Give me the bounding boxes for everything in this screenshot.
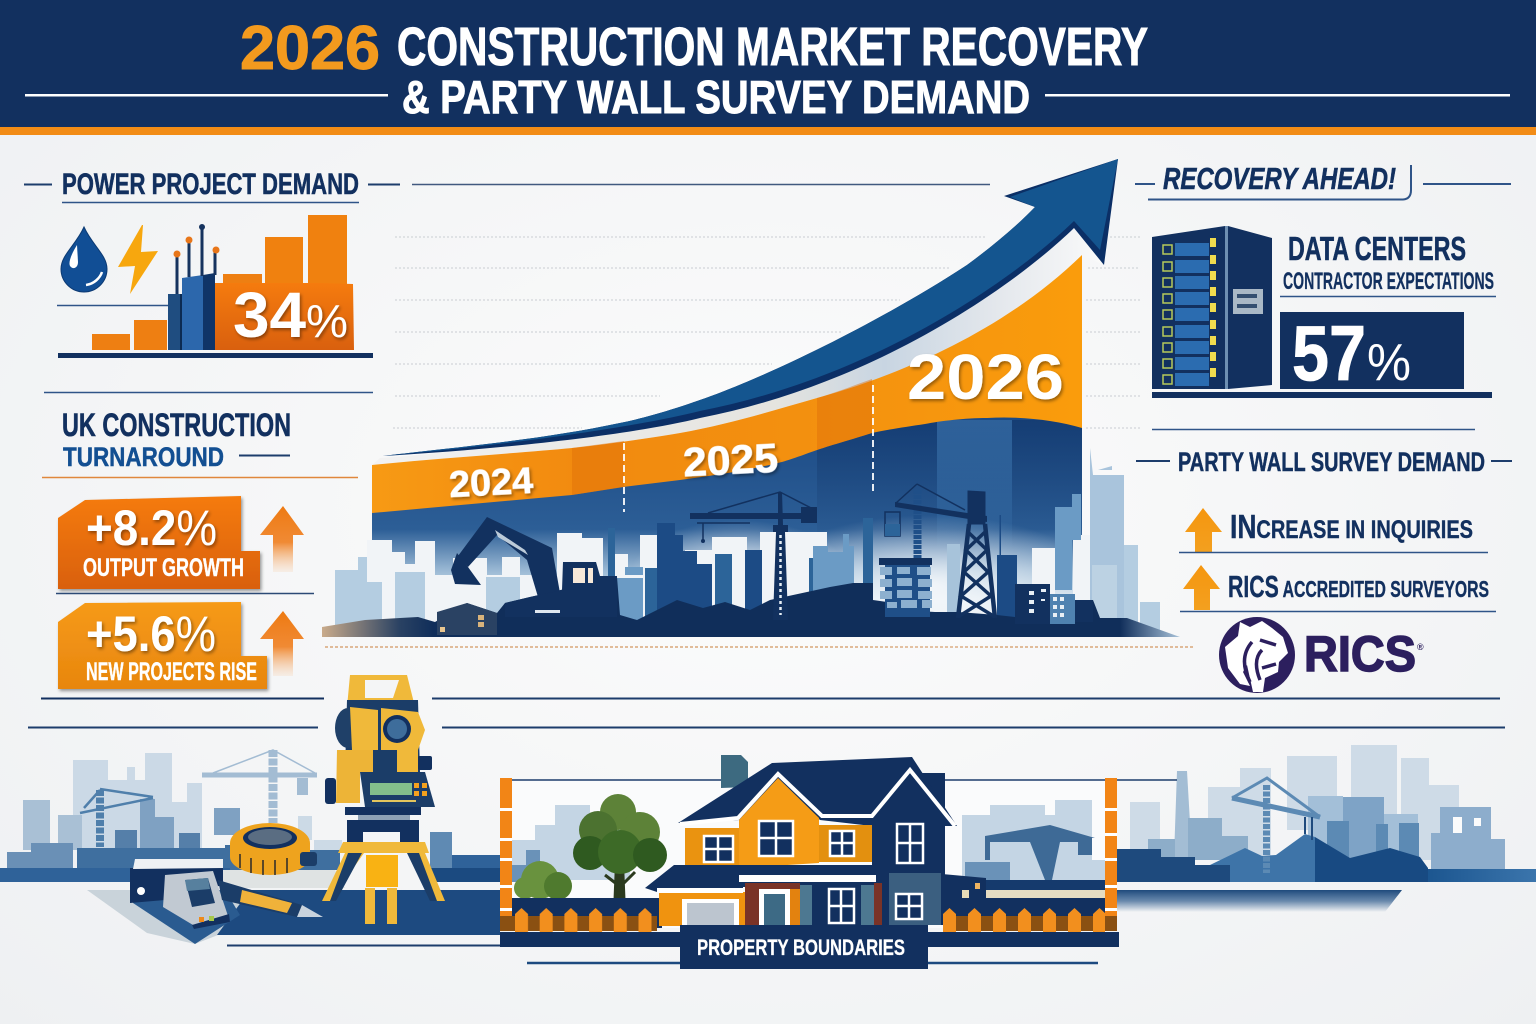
apartment block <box>879 558 932 617</box>
crane silhouette left <box>80 789 153 847</box>
stat: 57 percent: % <box>1367 334 1411 392</box>
heading: power project demand: POWER PROJECT DEMAND <box>62 168 359 201</box>
title banner: CONSTRUCTION MARKET RECOVERY <box>397 17 1148 77</box>
icon: water drop <box>61 227 107 292</box>
icon: up arrow surveyors <box>1183 565 1220 610</box>
excavator <box>437 517 617 635</box>
stat card: output growth: OUTPUT GROWTH <box>83 554 244 582</box>
dark foreground ground <box>322 577 1180 637</box>
panel: recovery ahead: RECOVERY AHEAD! <box>1163 161 1396 196</box>
chart: market recovery curve with skyline <box>322 159 1180 655</box>
stat card: new projects rise: +5.6% <box>86 606 216 662</box>
swoosh shadow <box>372 228 1104 465</box>
subheading: turnaround: TURNAROUND <box>63 442 224 472</box>
white back skyline <box>367 532 1090 625</box>
bar chart: rising power bars <box>58 215 373 358</box>
icon: up arrow inquiries <box>1185 508 1222 552</box>
year label 2024: 2024 <box>448 460 534 505</box>
orange band <box>372 255 1082 513</box>
panel: data centers <box>1152 226 1496 398</box>
icon: tree <box>573 794 667 900</box>
tower crane 1 <box>690 492 817 620</box>
crane silhouette right <box>1232 778 1320 873</box>
icon: total station on tripod <box>322 675 445 924</box>
title banner: & PARTY WALL SURVEY DEMAND <box>402 71 1030 123</box>
lattice tower <box>958 491 995 618</box>
logo: RICS lion: RICS <box>1304 626 1416 682</box>
chart backdrop sky <box>372 400 1100 655</box>
icon: up arrow amber <box>260 611 304 676</box>
logo: RICS lion <box>1219 617 1424 693</box>
label: property boundaries: PROPERTY BOUNDARIES <box>697 935 905 960</box>
big blue recovery arrow <box>383 159 1118 456</box>
fence posts and pickets <box>500 778 1117 933</box>
title banner: 2026 <box>240 14 380 83</box>
tower crane 2 <box>885 484 987 558</box>
stat: 57 percent: 57 <box>1292 309 1366 397</box>
heading: UK construction: UK CONSTRUCTION <box>62 407 291 443</box>
mid blue skyline <box>608 494 1081 625</box>
icon: tape measure <box>230 823 317 875</box>
icon: pen <box>218 880 323 917</box>
house windows <box>704 821 923 923</box>
small office block <box>1015 584 1093 624</box>
heading: data centers: DATA CENTERS <box>1288 230 1466 267</box>
stat: 34 percent: 34% <box>233 279 348 351</box>
panel: party wall survey demand <box>1136 447 1512 693</box>
icon: up arrow orange <box>260 506 304 572</box>
year label 2025: 2025 <box>682 435 779 485</box>
bottom left skyline <box>0 750 500 944</box>
text: increase in inquiries: INCREASE IN INQUIRIES <box>1230 508 1473 545</box>
logo: RICS lion: ® <box>1417 642 1424 652</box>
title banner <box>0 0 1536 135</box>
icon: server rack <box>1152 226 1272 389</box>
stat: 57 percent <box>1280 309 1464 397</box>
icon: survey device <box>130 859 230 929</box>
house <box>645 755 986 926</box>
stat card: output growth <box>58 496 260 589</box>
property boundary scene <box>500 755 1177 969</box>
background skyline behind house <box>512 800 1105 900</box>
pale blue skyline <box>335 545 1160 630</box>
panel: UK construction turnaround <box>41 407 358 698</box>
year label 2026: 2026 <box>907 341 1064 413</box>
survey tools group <box>130 675 445 929</box>
panel: power project demand <box>24 168 400 358</box>
stat card: new projects rise: NEW PROJECTS RISE <box>86 658 257 686</box>
icon: lightning bolt <box>118 225 158 294</box>
stat card: new projects rise <box>58 602 267 689</box>
icon: bush <box>514 861 572 900</box>
stat card: output growth: +8.2% <box>86 500 217 556</box>
crane silhouette centre <box>202 750 317 823</box>
label: property boundaries <box>680 925 928 969</box>
bottom right skyline <box>1117 745 1536 912</box>
